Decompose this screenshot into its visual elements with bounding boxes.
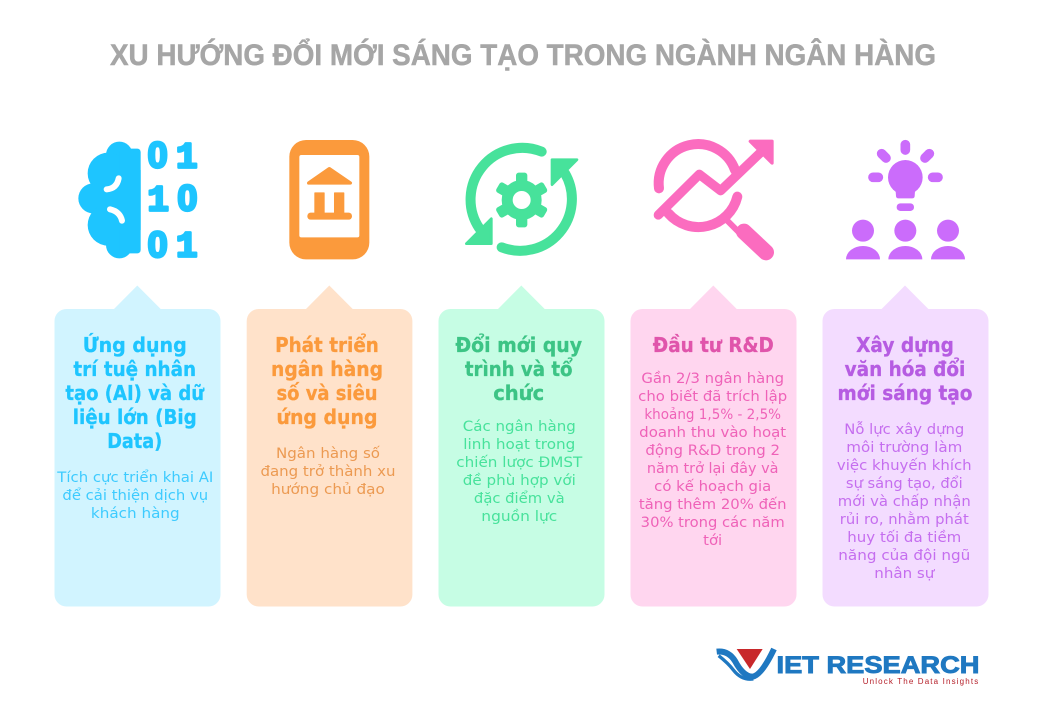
text: innovation culture description: năng của đội ngũ (838, 548, 970, 564)
heading: process innovation: trình và tổ (465, 356, 573, 381)
icon: AI brain with binary digits: 0 (148, 135, 168, 176)
text: R&D investment description: doanh thu vào hoạt (639, 425, 787, 441)
text: AI and big data description: để cải thiện dịch vụ (62, 487, 208, 504)
heading: digital banking: số và siêu (276, 381, 378, 405)
icon: light bulb over team (846, 145, 965, 259)
logo: Viet Research (717, 649, 980, 686)
heading: R&D investment: Đầu tư R&D (653, 333, 774, 357)
text: innovation culture description: nhân sự (874, 566, 935, 582)
text: process innovation description (456, 419, 582, 525)
text: innovation culture description: môi trường làm (846, 440, 962, 456)
text: AI and big data description: khách hàng (91, 506, 180, 522)
heading: AI and big data: liệu lớn (Big (73, 405, 197, 429)
text: R&D investment description (638, 371, 787, 549)
heading: AI and big data (65, 332, 205, 453)
text: digital banking description (260, 445, 396, 498)
text: process innovation description: Các ngân hàng (463, 419, 576, 435)
heading: digital banking (271, 332, 383, 429)
text: AI and big data description: Tích cực triển khai AI (56, 469, 213, 486)
icon: AI brain with binary digits: 1 (176, 137, 198, 178)
icon: magnifier with growth arrow (658, 141, 772, 252)
heading: innovation culture: văn hóa đổi (845, 356, 965, 381)
text: digital banking description: Ngân hàng số (276, 445, 380, 462)
heading: AI and big data: tạo (AI) và dữ (65, 381, 205, 405)
text: innovation culture description: huy tối đa tiềm (847, 529, 961, 546)
heading: innovation culture: Xây dựng (856, 333, 954, 357)
icon: AI brain with binary digits: 0 (177, 177, 197, 218)
icon: AI brain with binary digits: 0 (148, 224, 168, 265)
icon: process cycle with gear (466, 148, 577, 251)
logo: Viet Research: IET RESEARCH (776, 652, 980, 679)
text: R&D investment description: khoảng 1,5% - 2,5% (644, 407, 781, 423)
text: digital banking description: hướng chủ đạo (271, 482, 385, 498)
icon: AI brain with binary digits: 1 (147, 180, 169, 221)
heading: AI and big data: trí tuệ nhân (73, 357, 196, 381)
text: innovation culture description: sự sáng tạo, đổi (846, 475, 963, 492)
text: innovation culture description (837, 421, 972, 582)
panel: R&D investment (630, 286, 796, 606)
panel: AI and big data (54, 286, 220, 606)
text: innovation culture description: rủi ro, nhằm phát (840, 511, 969, 528)
heading: process innovation: Đổi mới quy (455, 332, 582, 357)
text: R&D investment description: Gần 2/3 ngân hàng (641, 371, 784, 387)
panel: digital banking (247, 286, 412, 606)
text: innovation culture description: việc khuyến khích (837, 457, 972, 474)
icon: AI brain with binary digits (78, 135, 198, 268)
text: process innovation description: đặc điểm và (474, 490, 565, 507)
text: AI and big data description (56, 469, 213, 522)
heading: process innovation (455, 332, 582, 405)
text: process innovation description: nguồn lực (481, 508, 557, 525)
icon: AI brain with binary digits: 1 (176, 227, 198, 268)
text: R&D investment description: tăng thêm 20% đến (639, 496, 787, 513)
panel: innovation culture (822, 286, 988, 606)
heading: digital banking: ngân hàng (271, 357, 383, 381)
heading: digital banking: Phát triển (275, 332, 379, 357)
text: process innovation description: linh hoạt trong (463, 437, 575, 453)
text: process innovation description: chiến lược ĐMST (456, 454, 582, 471)
text: digital banking description: đang trở thành xu (260, 464, 396, 480)
heading: innovation culture: mới sáng tạo (838, 381, 972, 405)
text: process innovation description: đề phù hợp với (463, 472, 576, 489)
title: XU HƯỚNG ĐỔI MỚI SÁNG TẠO TRONG NGÀNH NGÂN HÀNG (110, 38, 936, 72)
text: R&D investment description: có kế hoạch gia (654, 478, 771, 495)
heading: AI and big data: Ứng dụng (83, 332, 187, 357)
text: R&D investment description: 30% trong các năm (641, 515, 785, 531)
heading: digital banking: ứng dụng (276, 405, 378, 429)
text: R&D investment description: tới (703, 533, 722, 549)
text: innovation culture description: mới và chấp nhận (838, 494, 971, 510)
text: R&D investment description: cho biết đã trích lập (638, 388, 787, 405)
heading: AI and big data: Data) (107, 429, 162, 453)
heading: process innovation: chức (493, 381, 544, 405)
logo: Viet Research: Unlock The Data Insights (863, 677, 978, 686)
text: innovation culture description: Nỗ lực xây dựng (844, 421, 964, 438)
panel: process innovation (438, 286, 604, 606)
text: R&D investment description: năm trở lại đây và (647, 461, 779, 477)
heading: innovation culture (838, 333, 972, 405)
icon: mobile bank (289, 140, 369, 259)
text: R&D investment description: động R&D trong 2 (645, 443, 780, 459)
